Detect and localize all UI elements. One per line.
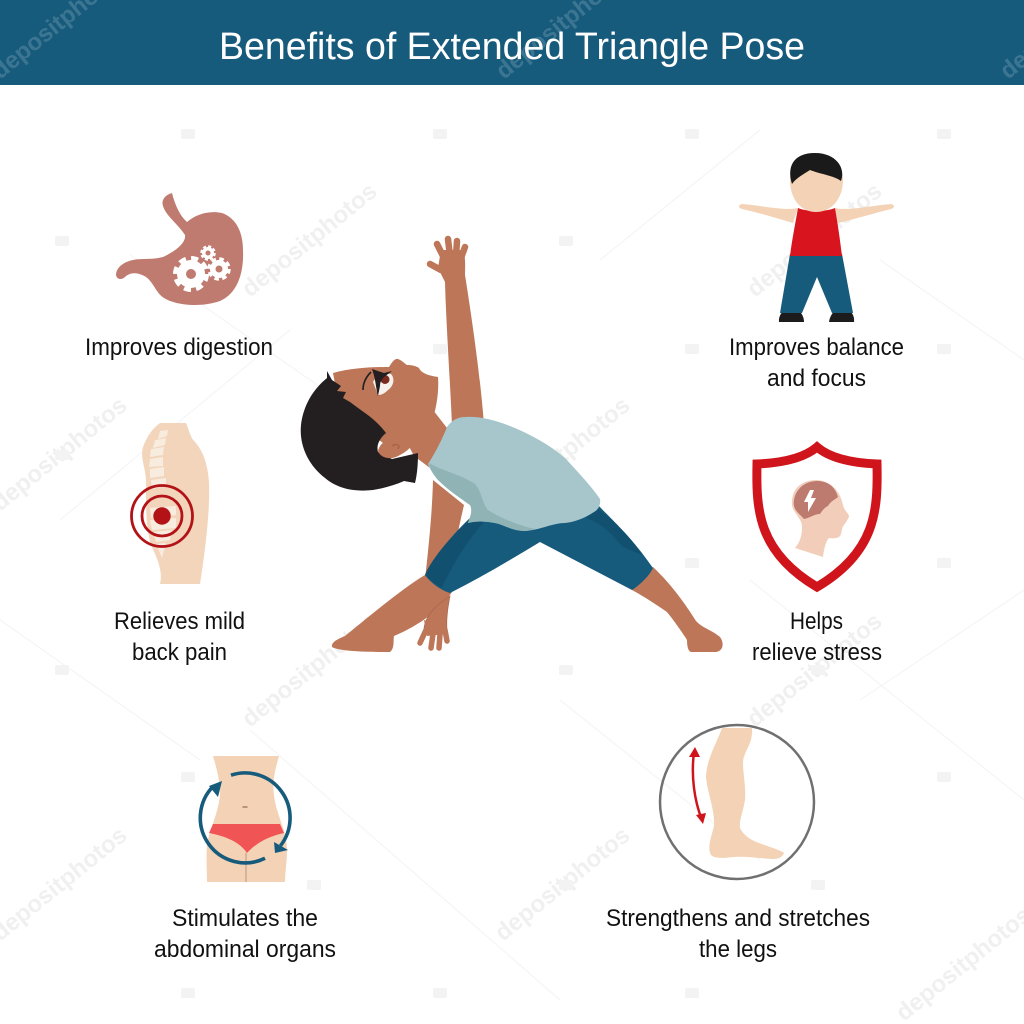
title banner [0, 0, 1024, 85]
lower hand [420, 596, 450, 648]
label: strengthens and stretches the legs [606, 905, 870, 963]
label: relieves mild back pain: back pain [132, 639, 227, 666]
ear [378, 437, 413, 458]
label: strengthens and stretches the legs: the legs [699, 936, 777, 963]
face [333, 359, 438, 450]
shorts [425, 505, 653, 593]
text: depositphotos [742, 178, 887, 303]
back leg [632, 567, 723, 652]
label: helps relieve stress: Helps [790, 608, 843, 635]
raised arm and upper hand [430, 239, 484, 425]
text: depositphotos [237, 608, 382, 733]
icon: leg in circle with stretch arrow [660, 725, 814, 879]
label: stimulates the abdominal organs [154, 905, 336, 963]
main figure: child in extended triangle pose [301, 239, 723, 652]
back arm [424, 480, 464, 590]
icon: stomach with gears [116, 193, 243, 305]
icon: shield with head and brain [757, 447, 877, 587]
text: depositphotos [742, 608, 887, 733]
text: depositphotos [490, 392, 635, 517]
front leg [332, 575, 452, 652]
shirt [428, 417, 600, 531]
label: stimulates the abdominal organs: Stimulates the [172, 905, 318, 932]
eye [363, 369, 393, 396]
label: helps relieve stress [752, 608, 882, 666]
label: helps relieve stress: relieve stress [752, 639, 882, 666]
text: depositphotos [490, 822, 635, 947]
icon: child balancing with arms out [739, 153, 894, 322]
label: improves balance and focus [729, 334, 904, 392]
label: improves balance and focus: and focus [767, 365, 866, 392]
neck [398, 410, 447, 468]
label: stimulates the abdominal organs: abdominal organs [154, 936, 336, 963]
hair [301, 371, 418, 491]
label: improves digestion: Improves digestion [85, 334, 273, 361]
label: relieves mild back pain [114, 608, 245, 666]
text: depositphotos [237, 178, 382, 303]
label: strengthens and stretches the legs: Strengthens and stretches [606, 905, 870, 932]
icon: back with pain target [132, 423, 209, 584]
title text: Benefits of Extended Triangle Pose [219, 26, 805, 68]
icon: abdomen with rotation arrows [200, 756, 290, 882]
label: relieves mild back pain: Relieves mild [114, 608, 245, 635]
label: improves balance and focus: Improves balance [729, 334, 904, 361]
